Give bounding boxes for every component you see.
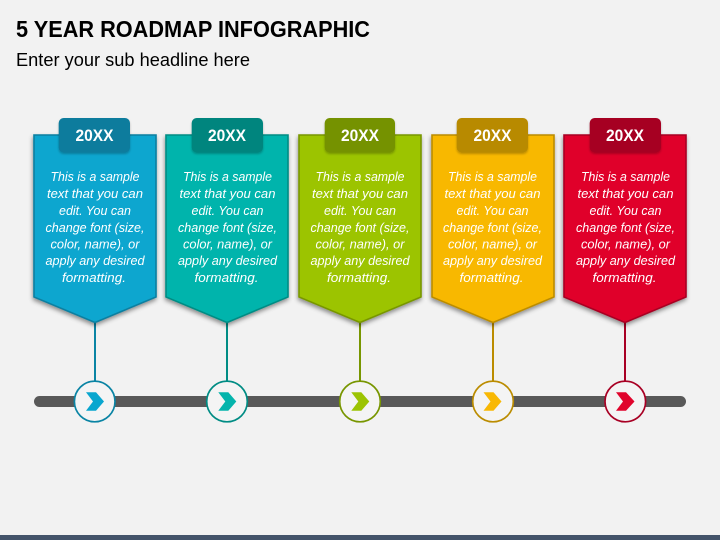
icon: chevron marker 3 bbox=[340, 381, 380, 422]
connector line 5 bbox=[624, 322, 626, 382]
panel: card 3: 20XX bbox=[341, 126, 380, 145]
icon: chevron marker 4 bbox=[473, 381, 513, 422]
panel: card 2: This is a sample bbox=[183, 169, 272, 184]
panel: card 5 bbox=[564, 118, 686, 322]
panel: card 2: formatting. bbox=[194, 270, 258, 285]
connector line 1 bbox=[94, 322, 96, 382]
panel: card 4 bbox=[432, 118, 554, 322]
panel: card 3: change font (size, bbox=[310, 220, 410, 235]
panel: card 5: edit. You can bbox=[590, 203, 662, 218]
panel: card 1: This is a sample bbox=[50, 169, 140, 184]
panel: card 4: edit. You can bbox=[456, 203, 528, 218]
panel: card 1: color, name), or bbox=[50, 236, 140, 252]
panel: card 3: edit. You can bbox=[324, 203, 396, 218]
icon: chevron marker 5 bbox=[605, 381, 646, 422]
icon: chevron marker 2 bbox=[207, 381, 247, 422]
panel: card 4: color, name), or bbox=[448, 236, 538, 252]
connector line 4 bbox=[492, 322, 494, 382]
panel: card 5: color, name), or bbox=[581, 236, 671, 252]
panel: card 3: formatting. bbox=[327, 270, 391, 285]
icon: chevron marker 1 bbox=[74, 381, 115, 422]
panel: card 1: edit. You can bbox=[59, 203, 131, 218]
title: 5 YEAR ROADMAP INFOGRAPHIC bbox=[16, 16, 370, 42]
panel: card 3: apply any desired bbox=[310, 253, 410, 268]
panel: card 1 bbox=[34, 118, 156, 322]
panel: card 2: change font (size, bbox=[178, 220, 277, 235]
panel: card 5: change font (size, bbox=[576, 220, 675, 235]
panel: card 5: formatting. bbox=[592, 270, 656, 285]
panel: card 2: color, name), or bbox=[183, 236, 273, 252]
panel: card 1: 20XX bbox=[76, 126, 114, 145]
panel: card 3 bbox=[299, 118, 421, 322]
timeline bar bbox=[34, 396, 686, 407]
panel: card 4: formatting. bbox=[460, 270, 524, 285]
subtitle: Enter your sub headline here bbox=[16, 49, 250, 70]
panel: card 2: 20XX bbox=[208, 126, 247, 145]
panel: card 2 bbox=[166, 118, 288, 322]
panel: card 4: change font (size, bbox=[443, 220, 542, 235]
panel: card 5: apply any desired bbox=[576, 253, 676, 268]
connector line 2 bbox=[226, 322, 228, 382]
panel: card 4: apply any desired bbox=[443, 253, 543, 268]
panel: card 1: formatting. bbox=[62, 270, 126, 285]
panel: card 5: 20XX bbox=[606, 126, 645, 145]
panel: card 4: 20XX bbox=[474, 126, 512, 145]
panel: card 1: change font (size, bbox=[46, 220, 144, 235]
panel: card 5: text that you can bbox=[578, 186, 674, 201]
footer bar bbox=[0, 535, 720, 540]
panel: card 2: text that you can bbox=[180, 186, 276, 201]
panel: card 3: This is a sample bbox=[316, 169, 404, 184]
panel: card 3: text that you can bbox=[312, 186, 408, 201]
panel: card 3: color, name), or bbox=[316, 236, 405, 252]
panel: card 1: text that you can bbox=[47, 186, 143, 201]
connector line 3 bbox=[359, 322, 361, 382]
panel: card 2: apply any desired bbox=[178, 253, 278, 268]
panel: card 4: text that you can bbox=[444, 186, 540, 201]
panel: card 4: This is a sample bbox=[448, 169, 537, 184]
panel: card 5: This is a sample bbox=[581, 169, 670, 184]
panel: card 2: edit. You can bbox=[192, 203, 264, 218]
panel: card 1: apply any desired bbox=[46, 253, 145, 268]
